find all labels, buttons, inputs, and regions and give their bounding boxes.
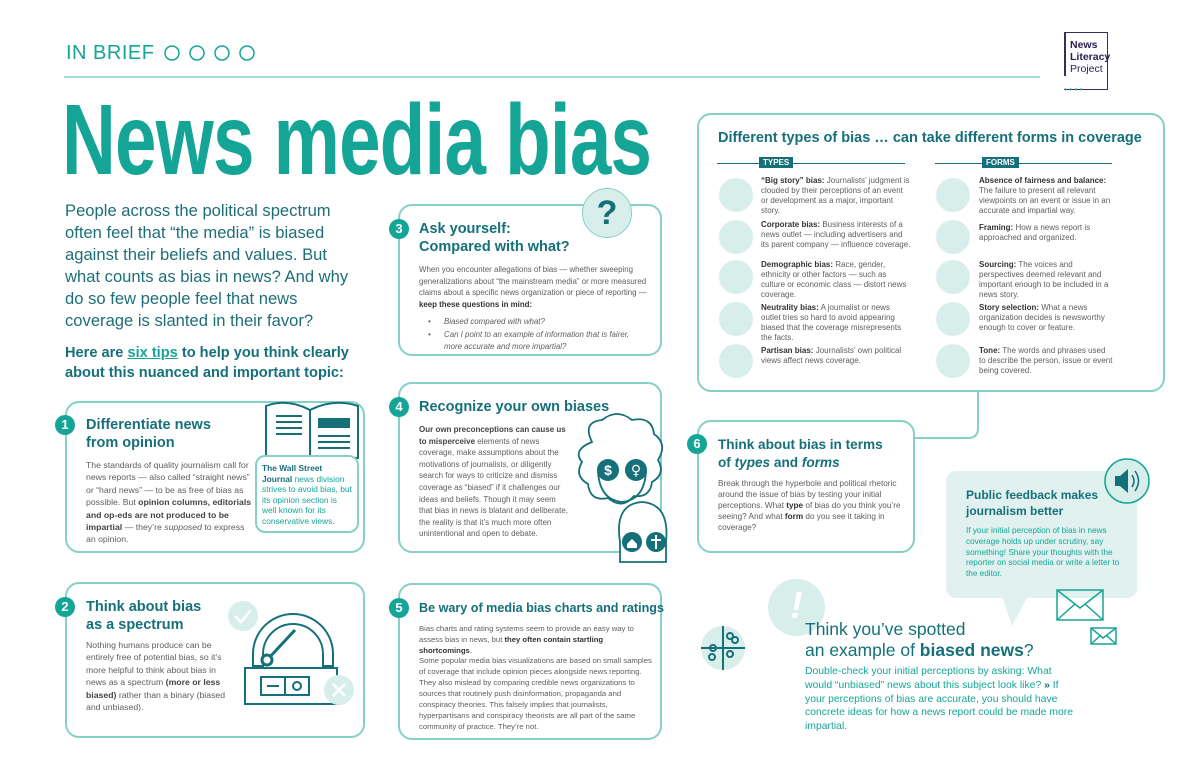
logo: News Literacy Project: News <box>1070 39 1097 51</box>
panel 2: spectrum: Nothing humans produce can be entirely free of potential bias, so it’s more helpful to think about bias in news as a spectrum (more or less biased) rather than a binary (biased and unbiased). <box>86 640 225 712</box>
panel 3: compared with what: Biased compared with what? <box>444 317 545 326</box>
panel 6: types and forms: of types and forms <box>718 455 840 470</box>
column: forms: Tone: The words and phrases used to describe the person, issue or event being covered. <box>979 346 1112 375</box>
heading: spotted biased news <box>805 619 1034 660</box>
panel 6: types and forms: Break through the hyperbole and political rhetoric around the issue of bias by testing your initial perceptions. What type of bias do you think you’re seeing? And what form do you see it taking in coverage? <box>718 479 901 532</box>
six tips lead-in: Here are six tips to help you think clearly about this nuanced and important topic: <box>65 345 349 381</box>
icon: speaker <box>1104 458 1150 504</box>
panel 2: spectrum: as a spectrum <box>86 617 184 633</box>
logo: News Literacy Project: •••• <box>1064 85 1085 94</box>
panel 5: media bias charts: Be wary of media bias charts and ratings <box>419 601 664 615</box>
connector line <box>915 392 979 439</box>
icon: gauge meter <box>228 601 354 705</box>
logo: News Literacy Project <box>1064 32 1110 94</box>
speech bubble tail <box>1002 598 1027 626</box>
panel 4: recognize biases: Recognize your own biases <box>419 399 609 415</box>
text: 1 <box>61 417 69 432</box>
panel 3: compared with what: 3 <box>395 221 403 236</box>
column: forms: FORMS <box>986 158 1015 167</box>
column: types: TYPES <box>763 158 789 167</box>
panel 5: media bias charts: Bias charts and rating systems seem to provide an easy way to assess bias in news, but they often contain startling shortcomings. <box>419 624 634 655</box>
column: types: Demographic bias: Race, gender, ethnicity or other factors — such as culture or economic class — distort news coverage. <box>761 260 906 299</box>
panel 3: compared with what: When you encounter allegations of bias — whether sweeping generalizations about “the mainstream media” or more measured claims about a specific news organization or piece of reporting — keep these questions in mind: <box>419 265 647 309</box>
panel 6: types and forms <box>697 420 915 553</box>
panel 3: compared with what: Compared with what? <box>419 239 570 255</box>
panel 3: compared with what: Can I point to an example of information that is fairer, more accurate and more impartial? <box>444 330 629 351</box>
panel 3: compared with what: Ask yourself: <box>419 221 511 237</box>
panel 1: differentiate news from opinion: Differentiate news <box>86 417 211 433</box>
column: types: Neutrality bias: A journalist or news outlet tries so hard to avoid appearing biased that the coverage misrepresents the facts. <box>761 303 901 342</box>
column: forms: Sourcing: The voices and perspectives deemed relevant and important enough to be included in a news story. <box>979 260 1108 299</box>
icon: question mark <box>582 188 632 238</box>
column: types: “Big story” bias: Journalists’ judgment is clouded by their perceptions of an event or development as a major, important story. <box>761 176 910 215</box>
heading: spotted biased news: Think you’ve spotted <box>805 619 966 639</box>
icon: newspaper <box>265 402 359 459</box>
icon: exclamation: ! <box>790 585 803 627</box>
heading: spotted biased news: an example of biased news? <box>805 640 1034 660</box>
panel 3: compared with what: • <box>428 317 431 326</box>
title: News media bias <box>62 84 651 196</box>
column: types <box>717 157 910 378</box>
panel 5: media bias charts: Some popular media bias visualizations are based on small samples of coverage that include opinion pieces alongside news reporting. They also mislead by comparing credible news organizations to sources that routinely push disinformation, propaganda and conspiracy theories. This falsely implies that journalists, hyperpartisans and conspiracy theorists are all part of the same community of practice. They’re not. <box>419 656 652 731</box>
heading: types and forms: Different types of bias … can take different forms in coverage <box>718 130 1142 146</box>
callout: public feedback: journalism better <box>966 504 1063 518</box>
callout: wall street journal <box>255 455 359 533</box>
header label: in brief <box>66 42 255 64</box>
callout: wall street journal: The Wall Street Journal news division strives to avoid bias, but its opinion section is well known for its conservative views. <box>262 463 352 526</box>
column: forms: Absence of fairness and balance: The failure to present all relevant viewpoints on an event or issue in an accurate and impartial way. <box>979 176 1110 215</box>
panel 4: recognize biases: 4 <box>395 399 403 414</box>
panel 3: compared with what: • <box>428 330 431 339</box>
icon: envelopes <box>1056 589 1117 645</box>
panel 4: recognize biases: Our own preconceptions can cause us to misperceive elements of news coverage, make assumptions about the motivations of journalists, or diligently search for ways to criticize and dismiss coverage as “biased” if it challenges our ideas and beliefs. Though it may seem that bias in news is blatant and deliberate, the reality is that it’s much more often unintentional and open to debate. <box>419 425 568 538</box>
icon: question mark: ? <box>597 194 617 232</box>
panel 1: differentiate news from opinion: The standards of quality journalism call for news reports — also called “straight news” or “hard news” — to be as free of bias as possible. But opinion columns, editorials and op-eds are not produced to be impartial — they’re supposed to express an opinion. <box>86 460 251 544</box>
icon: bias chart quadrant <box>701 626 745 670</box>
panel 2: spectrum <box>65 582 365 738</box>
column: forms: Story selection: What a news organization decides is newsworthy enough to cover or feature. <box>979 303 1105 332</box>
column: types: Corporate bias: Business interests of a news outlet — including advertisers and its parent company — influence coverage. <box>761 220 910 249</box>
logo: News Literacy Project: Literacy <box>1070 51 1110 63</box>
icon: faces with biased glasses: ♀ <box>631 463 641 479</box>
panel 6: types and forms: Think about bias in terms <box>718 437 883 452</box>
text: double check: Double-check your initial perceptions by asking: What would “unbiased” news about this subject look like? » If your perceptions of bias are accurate, you should have concrete ideas for how a news report could be made more impartial. <box>805 666 1073 732</box>
panel 5: media bias charts: 5 <box>395 600 403 615</box>
panel 2: spectrum: Think about bias <box>86 599 201 615</box>
text: 6 <box>693 436 701 451</box>
column: forms: Framing: How a news report is approached and organized. <box>979 223 1090 242</box>
panel 3: compared with what <box>398 204 662 356</box>
logo: News Literacy Project: Project <box>1070 63 1103 75</box>
callout: public feedback: If your initial perception of bias in news coverage holds up under scrutiny, say something! Share your thoughts with the reporter on social media or write a letter to the editor. <box>966 526 1119 578</box>
icon: exclamation <box>768 579 825 636</box>
panel: types and forms of bias <box>697 113 1165 392</box>
icon: faces with biased glasses: $ <box>604 462 612 478</box>
header label: in brief: IN BRIEF <box>66 42 154 64</box>
text: 2 <box>61 599 69 614</box>
column: types: Partisan bias: Journalists’ own political views affect news coverage. <box>761 346 901 365</box>
callout: public feedback: Public feedback makes <box>966 488 1098 502</box>
panel 1: differentiate news from opinion <box>65 401 365 553</box>
panel 5: media bias charts <box>398 583 662 740</box>
intro paragraph: People across the political spectrum often feel that “the media” is biased against their beliefs and values. But what counts as bias in news? And why do so few people feel that news coverage is slanted in their favor? <box>65 201 348 330</box>
icon: faces with biased glasses <box>578 413 668 563</box>
callout: public feedback <box>946 471 1137 598</box>
panel 1: differentiate news from opinion: from opinion <box>86 435 175 451</box>
column: forms <box>935 157 1112 378</box>
panel 4: recognize biases <box>398 382 662 553</box>
